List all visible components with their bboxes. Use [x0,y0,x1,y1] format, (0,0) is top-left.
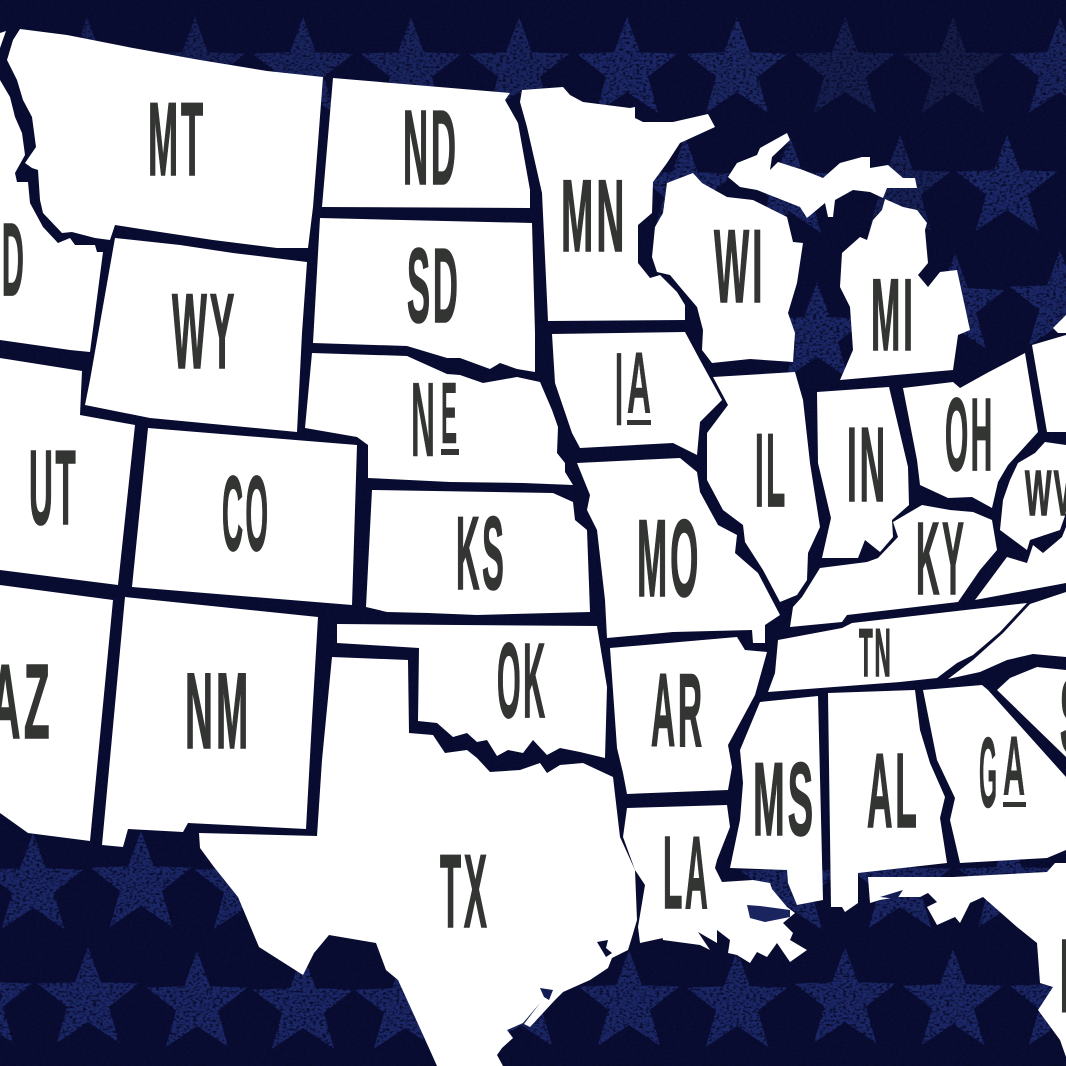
state: Alabama: AL [867,730,920,850]
state: Arkansas [610,637,767,794]
state: Oklahoma [337,620,607,758]
state: Missouri [577,458,780,643]
state: Arizona [0,585,113,841]
state: Pennsylvania [1032,335,1066,432]
state: Tennessee: TN [859,614,893,691]
state: Kentucky: KY [916,502,966,617]
state: Arkansas: AR [651,653,705,769]
state: Michigan upper peninsula [728,133,917,218]
state: Georgia: G [979,717,997,829]
state: Virginia [975,527,1066,600]
state: Utah: UT [29,428,78,547]
state: North Carolina [948,592,1066,679]
state: North Dakota: ND [403,89,459,207]
state: Ohio: OH [945,378,995,493]
state: Illinois [707,372,820,602]
state: Michigan lower peninsula: MI [871,259,916,373]
state: Nebraska: E [441,365,457,462]
state: Kentucky [790,502,997,627]
state: Michigan lower peninsula [840,199,970,380]
state: Texas [199,657,637,1066]
state: Missouri: MO [637,498,701,620]
state: West Virginia [1000,442,1066,550]
state: Florida [868,863,1066,1057]
state: Iowa [552,332,722,455]
state: New Mexico: NM [185,652,251,772]
state: New Mexico [102,597,318,847]
state: Indiana: IN [847,404,888,524]
state: Georgia: A [1003,719,1025,813]
state: Indiana [817,387,909,558]
state: Louisiana [623,805,807,963]
state: Mississippi: MS [753,741,816,858]
state: Wisconsin: WI [714,207,765,325]
state: Iowa: I [615,332,623,448]
state: Montana [7,29,323,248]
state: North Dakota [322,78,530,208]
state: Georgia [923,685,1066,863]
state: Wyoming [85,238,307,432]
state: Alabama [828,690,947,912]
state: Minnesota [520,87,715,321]
state: Texas: TX [440,834,490,950]
state: Nebraska: N [411,361,435,479]
state: Mississippi [730,696,823,905]
state: Iowa: A [627,335,651,432]
state: Colorado: CO [222,456,270,573]
state: Wyoming: WY [172,272,237,391]
state: Wisconsin [652,173,803,363]
state: Utah [0,358,135,585]
state: Nebraska [305,353,573,485]
state: Idaho [0,31,103,352]
state: Colorado [132,428,357,605]
state: Louisiana: LA [663,816,710,931]
state: Kansas: KS [456,496,506,612]
state: South Dakota: SD [407,227,461,345]
state: Montana: MT [148,83,206,198]
state: Oklahoma: OK [497,620,547,740]
state: New York [1053,315,1066,333]
state: South Dakota [313,218,535,372]
state: Kansas [366,490,590,615]
state: Tennessee [768,603,1027,692]
state: Minnesota: MN [561,160,627,273]
state: Ohio [903,353,1038,508]
state: Illinois: IL [755,414,788,529]
state: South Carolina [997,659,1066,775]
